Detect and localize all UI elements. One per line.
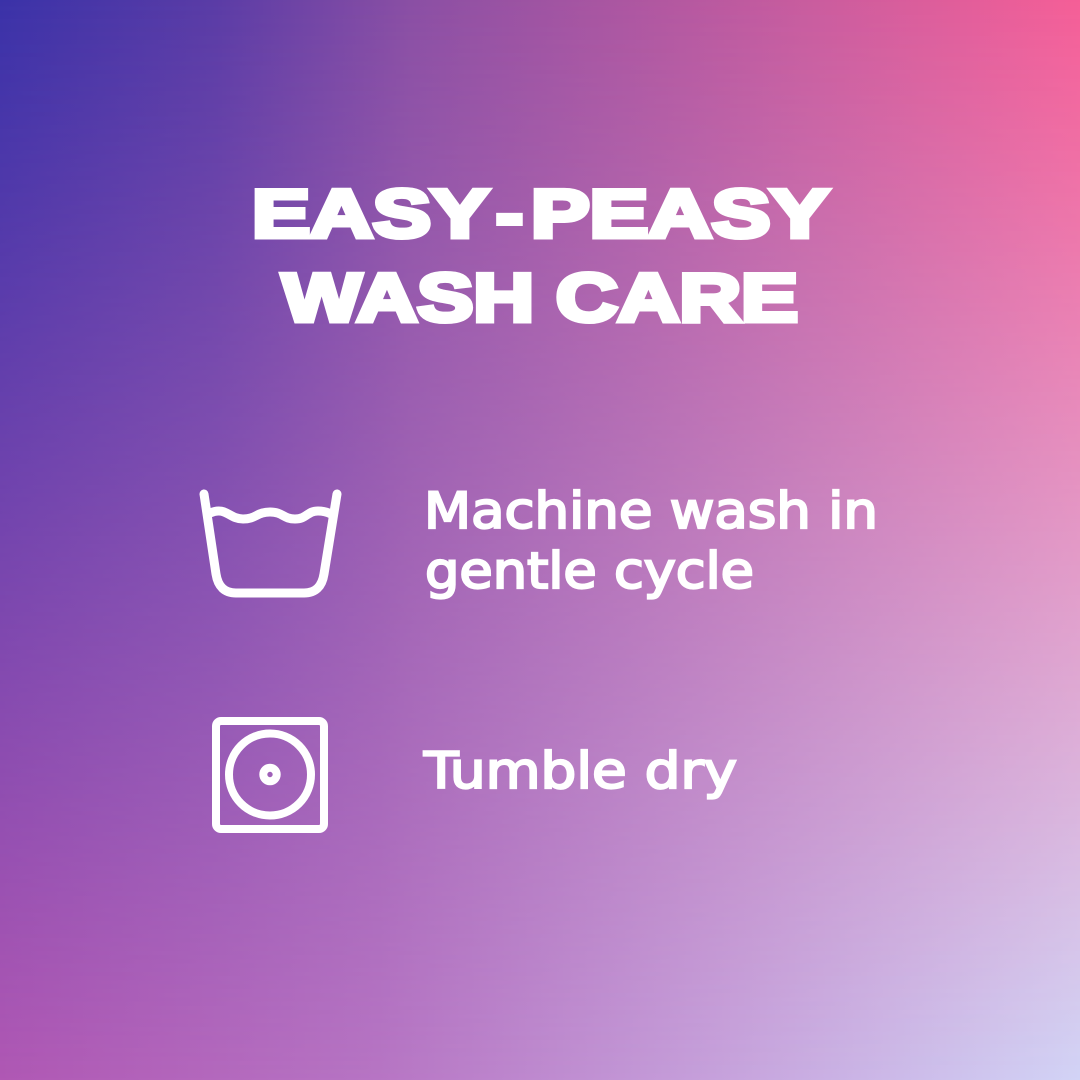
icon: tumble dry bbox=[216, 721, 324, 829]
title: - bbox=[496, 176, 523, 252]
title: EASY bbox=[252, 176, 489, 252]
text: machine wash: Machine wash in bbox=[424, 482, 878, 540]
text: tumble dry: Tumble dry bbox=[423, 742, 737, 800]
icon: wash tub bbox=[204, 494, 337, 593]
text: machine wash bbox=[424, 482, 878, 600]
title: CARE bbox=[556, 260, 798, 336]
title bbox=[252, 176, 829, 336]
title: WASH bbox=[282, 260, 534, 336]
text: machine wash: gentle cycle bbox=[425, 542, 754, 600]
title: PEASY bbox=[531, 176, 829, 252]
